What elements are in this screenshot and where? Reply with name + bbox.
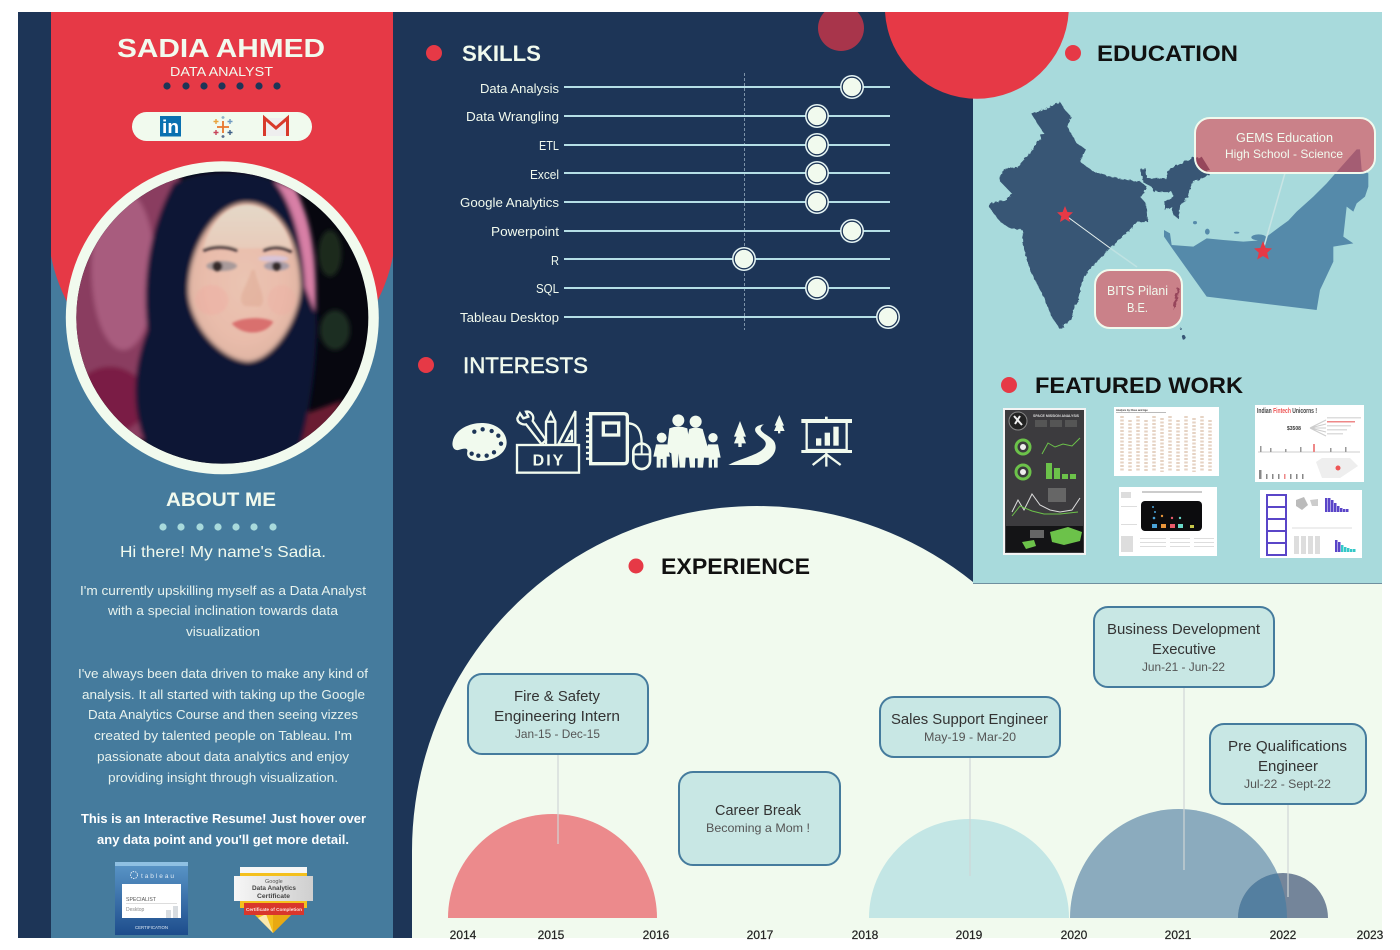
tooltip: sales support: May-19 - Mar-20 <box>924 730 1016 744</box>
about text block: I've always been data driven to make any kind of <box>78 666 368 681</box>
timeline axis labels: 2019 <box>956 928 983 942</box>
semicircle: pre qualifications 2022 <box>1238 873 1328 918</box>
name title: SADIA AHMED <box>117 33 325 63</box>
thumbnail: tan columns chart: Analysis by Class and Age <box>1116 409 1148 412</box>
about text block: passionate about data analytics and enjoy <box>97 749 350 764</box>
interests heading: INTERESTS <box>463 353 588 378</box>
timeline axis labels: 2017 <box>747 928 774 942</box>
skills dot plot: Data Analysis <box>480 81 559 96</box>
tooltip: career break: Becoming a Mom ! <box>706 821 810 835</box>
header dots <box>163 82 281 90</box>
decorative red circle <box>885 12 1069 99</box>
icon: star India <box>1057 206 1073 222</box>
about text block: visualization <box>186 624 260 639</box>
tooltip: career break: Career Break <box>715 802 801 819</box>
timeline axis labels <box>450 928 1384 942</box>
tooltip: business development: Business Development <box>1107 621 1261 638</box>
skills dot plot: ETL <box>539 138 559 153</box>
icon: palette <box>452 423 507 461</box>
timeline axis labels: 2021 <box>1165 928 1192 942</box>
tooltip: business development: Jun-21 - Jun-22 <box>1142 660 1225 674</box>
timeline axis labels: 2016 <box>643 928 670 942</box>
callout: GEMS Education <box>1195 118 1375 173</box>
interactive note: any data point and you'll get more detail. <box>97 832 349 847</box>
timeline axis labels: 2022 <box>1270 928 1297 942</box>
experience heading: EXPERIENCE <box>661 554 810 579</box>
skills dot plot: Data Wrangling <box>466 109 559 124</box>
icon: tableau <box>214 116 232 138</box>
callout: BITS Pilani: B.E. <box>1127 300 1148 315</box>
skills dot plot: Tableau Desktop <box>460 310 559 325</box>
about me heading: ABOUT ME <box>166 490 276 511</box>
badge: tableau certification: SPECIALIST <box>126 897 157 903</box>
panel bottom edge line <box>973 582 1382 584</box>
leader line: BITS Pilani <box>1065 215 1110 248</box>
timeline connector lines <box>558 687 1288 897</box>
thumbnail: Indian Fintech Unicorns: Indian Fintech Unicorns ! <box>1257 408 1317 415</box>
timeline axis labels: 2015 <box>538 928 565 942</box>
about text block: providing insight through visualization. <box>108 770 338 785</box>
social links pill <box>132 112 312 141</box>
tooltip: pre qualifications: Pre Qualifications <box>1228 738 1347 755</box>
thumbnail: purple dashboard <box>1260 490 1362 558</box>
decorative dark red circle <box>818 12 864 51</box>
badge: tableau certification: tableau <box>141 873 174 880</box>
thumbnail: space mission dashboard: SPACE MISSION ANALYSIS <box>1033 414 1080 418</box>
icon: DIY tools: DIY <box>533 453 564 470</box>
tooltip: fire and safety <box>468 674 648 754</box>
icon: winding road and trees <box>728 415 785 465</box>
map: India <box>989 102 1210 340</box>
icon: family <box>653 414 721 468</box>
callout: BITS Pilani <box>1095 270 1182 328</box>
about text block <box>78 583 368 785</box>
callout: BITS Pilani: BITS Pilani <box>1107 283 1168 298</box>
panel: sidebar <box>51 12 393 938</box>
callout: GEMS Education: GEMS Education <box>1236 130 1333 145</box>
skills heading <box>426 41 541 66</box>
badge: google certificate <box>234 867 313 933</box>
interactive note: This is an Interactive Resume! Just hover over <box>81 811 366 826</box>
skills dot plot: Powerpoint <box>491 224 559 239</box>
semicircle: fire and safety 2015 <box>448 814 657 918</box>
icon: gmail <box>264 118 288 136</box>
timeline axis labels: 2014 <box>450 928 477 942</box>
tooltip: fire and safety: Fire & Safety <box>514 688 600 705</box>
callout: GEMS Education: High School - Science <box>1225 147 1343 161</box>
education heading: EDUCATION <box>1097 41 1238 66</box>
about text block: created by talented people on Tableau. I'm <box>94 728 352 743</box>
badge: google certificate: Data Analytics <box>252 885 296 892</box>
panel: skills <box>426 41 900 330</box>
tooltip: pre qualifications <box>1210 724 1366 804</box>
experience background shape <box>412 506 1382 938</box>
panel: education <box>989 41 1375 340</box>
about dots <box>159 523 277 531</box>
about text block: I'm currently upskilling myself as a Data Analyst <box>80 583 366 598</box>
red header shape <box>51 12 393 397</box>
about text block: analysis. It all started with taking up the Google <box>82 687 365 702</box>
skills dot plot: Google Analytics <box>460 195 560 210</box>
badge: google certificate: Certificate <box>257 893 290 900</box>
skills heading: SKILLS <box>462 41 541 66</box>
badge: google certificate: Certificate of Completion <box>246 907 302 913</box>
featured work heading: FEATURED WORK <box>1035 373 1243 398</box>
tooltip: business development <box>1094 607 1274 687</box>
about text block: Data Analytics Course and then seeing vizzes <box>88 707 359 722</box>
tooltip: fire and safety: Engineering Intern <box>494 708 620 725</box>
tooltip: sales support: Sales Support Engineer <box>891 711 1048 728</box>
icon: linkedin: in <box>162 117 179 137</box>
semicircle: business development 2021 <box>1070 809 1287 918</box>
thumbnail: phone dashboard <box>1119 487 1217 556</box>
skills dot plot: SQL <box>536 281 559 296</box>
greeting: Hi there! My name's Sadia. <box>120 544 326 561</box>
badge: tableau certification <box>115 862 188 935</box>
timeline axis labels: 2020 <box>1061 928 1088 942</box>
tooltip: business development: Executive <box>1152 641 1216 658</box>
badge: tableau certification: CERTIFICATION <box>135 925 168 931</box>
panel: interests <box>418 353 852 473</box>
semicircle overlap <box>1238 873 1287 918</box>
tooltip: fire and safety: Jan-15 - Dec-15 <box>515 727 600 741</box>
thumbnail: tan columns chart <box>1114 407 1219 476</box>
panel: education background <box>973 12 1382 583</box>
leader line: GEMS <box>1263 173 1285 250</box>
thumbnail: Indian Fintech Unicorns <box>1255 405 1364 482</box>
icon: star UAE <box>1254 241 1272 260</box>
tooltip: sales support <box>880 697 1060 757</box>
skills dot plot: R <box>551 253 559 268</box>
skills dot plot <box>460 73 900 330</box>
job subtitle: DATA ANALYST <box>170 64 273 79</box>
tooltip: pre qualifications: Engineer <box>1258 758 1318 775</box>
icon: DIY tools <box>517 411 579 473</box>
timeline axis labels: 2018 <box>852 928 879 942</box>
tooltip: pre qualifications: Jul-22 - Sept-22 <box>1244 777 1331 791</box>
icon: presentation board <box>801 417 852 467</box>
badge: tableau certification: Desktop <box>126 907 145 913</box>
leader line fade <box>1110 248 1137 267</box>
panel: experience <box>448 554 1384 942</box>
icon: notebook and mouse <box>586 414 650 469</box>
about text block: with a special inclination towards data <box>107 603 339 618</box>
panel: featured work <box>1001 373 1364 558</box>
interactive note <box>81 811 366 847</box>
profile photo <box>66 161 379 474</box>
semicircle: sales support 2019 <box>869 819 1069 918</box>
thumbnail: space mission dashboard <box>1003 408 1086 555</box>
map: UAE <box>1164 149 1368 310</box>
tooltip: career break <box>679 772 840 865</box>
skills dot plot: Excel <box>530 167 559 182</box>
badge: google certificate: Google <box>265 879 283 885</box>
timeline axis labels: 2023 <box>1357 928 1384 942</box>
thumbnail: Indian Fintech Unicorns: $3508 <box>1287 426 1301 432</box>
